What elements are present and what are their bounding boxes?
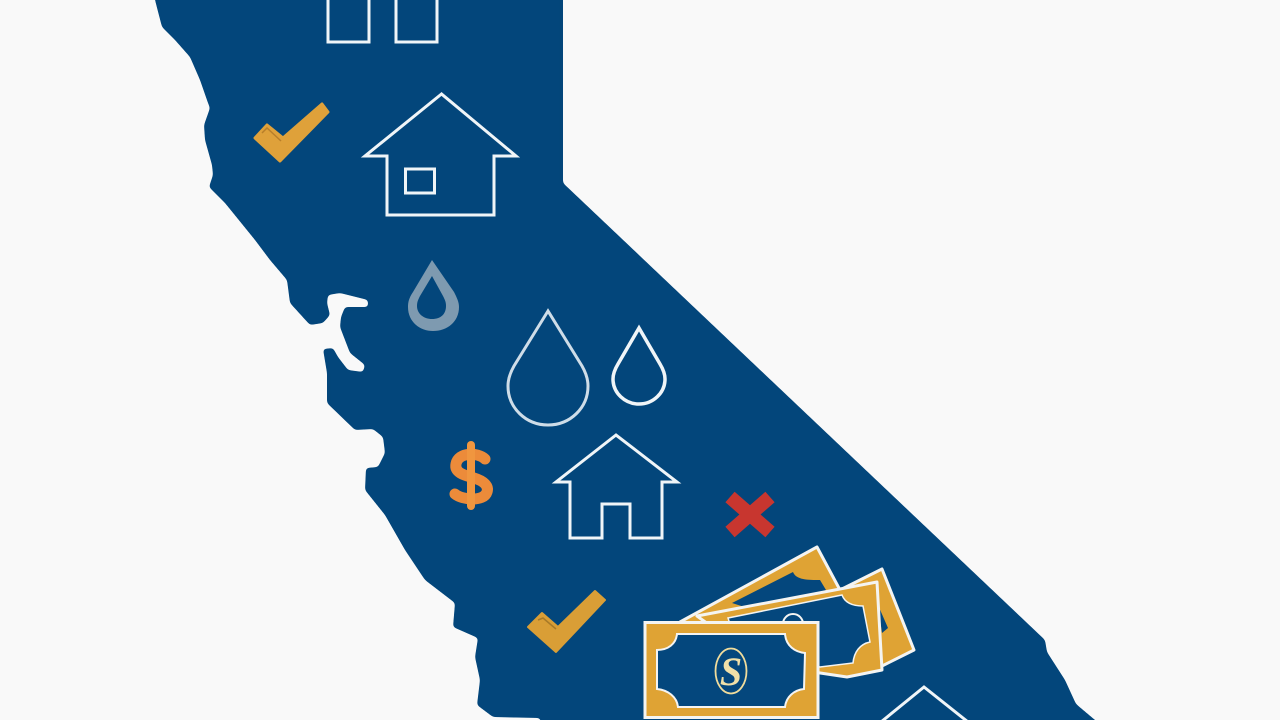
- icon: gold check mark lower: [528, 591, 605, 652]
- icon: orange dollar sign: [455, 445, 487, 506]
- map: California silhouette: [153, 0, 1120, 720]
- icon: partial house at bottom: [881, 687, 968, 720]
- coin behind front note: [783, 614, 803, 634]
- banknote seal: S: [720, 649, 742, 694]
- icon: house outline with window: [365, 94, 516, 215]
- middle banknote: [697, 582, 882, 677]
- front banknote: [645, 622, 818, 718]
- icon: stack of gold banknotes: [645, 547, 914, 718]
- back banknote: [680, 547, 914, 667]
- back banknote window: [732, 572, 888, 633]
- icon: small water drop outline: [613, 328, 665, 404]
- icon: twin rectangles at top: [328, 0, 437, 42]
- icon: house outline with door: [556, 435, 677, 538]
- front banknote window: [657, 634, 805, 707]
- icon: red cross: [730, 497, 770, 532]
- icon: grey water drop: [408, 260, 459, 331]
- icon: gold check mark upper: [255, 104, 328, 161]
- middle banknote window: [728, 595, 870, 667]
- icon: large water drop outline: [508, 311, 588, 425]
